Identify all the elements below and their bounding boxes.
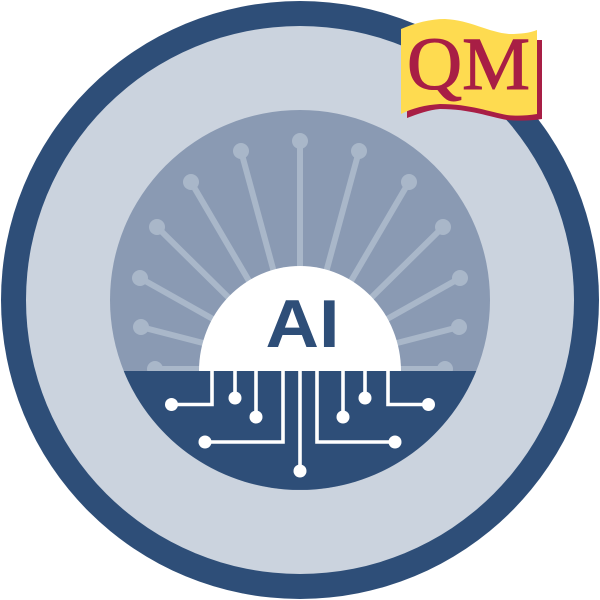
flag body — [401, 19, 537, 116]
circuit nodes — [165, 392, 435, 478]
QM letters: QM — [407, 23, 530, 106]
central sunburst disc — [110, 110, 490, 490]
QM flag logo — [401, 19, 542, 121]
AI label: AI — [266, 286, 340, 362]
circuit traces — [172, 371, 428, 471]
lower circuit panel — [124, 371, 476, 490]
white dome — [199, 266, 401, 371]
radiating node lines — [132, 133, 468, 377]
flag shadow — [407, 40, 542, 121]
